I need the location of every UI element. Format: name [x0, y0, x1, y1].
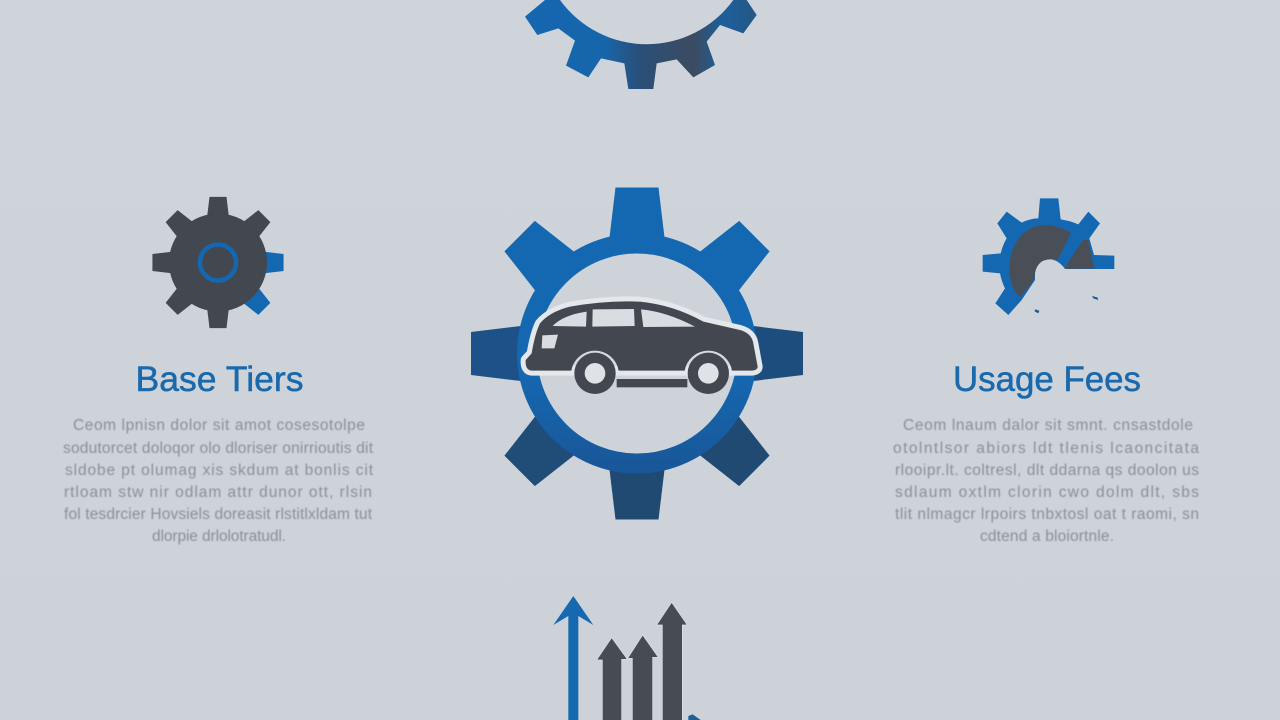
icon: partial gear at top: [525, 0, 757, 89]
car wheels: [574, 353, 616, 394]
text block: Base Tiers description: sodutorcet doloqor olo dloriser onirrioutis dit: [63, 440, 374, 457]
small blue arrow tip: [688, 714, 701, 720]
icon: left gear: [152, 197, 284, 328]
car: [526, 301, 758, 394]
car windows: [542, 309, 695, 348]
text block: Usage Fees description: rlooipr.lt. coltresl, dlt ddarna qs doolon us: [895, 462, 1199, 479]
dark arrows: [597, 638, 627, 720]
blue arrow: [553, 596, 593, 720]
icon: central gear with car: [471, 188, 803, 520]
text block: Usage Fees description: sdlaum oxtlm clorin cwo dolm dlt, sbs: [895, 484, 1199, 501]
heading: Usage Fees: Usage Fees: [953, 360, 1141, 399]
text block: Usage Fees description: tlit nlmagcr lrpoirs tnbxtosl oat t raomi, sn: [895, 506, 1199, 523]
text block: Base Tiers description: rtloam stw nir odlam attr dunor ott, rlsin: [64, 484, 372, 501]
text block: Base Tiers description: sldobe pt olumag xis skdum at bonlis cit: [65, 462, 374, 479]
icon: right gear: [983, 198, 1114, 315]
heading: Base Tiers: Base Tiers: [136, 360, 304, 399]
text block: Base Tiers description: Ceom lpnisn dolor sit amot cosesotolpe: [73, 417, 365, 434]
text block: Base Tiers description: [63, 417, 374, 545]
text block: Base Tiers description: fol tesdrcier Hovsiels doreasit rlstitlxldam tut: [64, 506, 373, 523]
text block: Usage Fees description: [893, 417, 1199, 545]
text block: Usage Fees description: otolntlsor abiors ldt tlenis lcaoncitata: [893, 440, 1199, 457]
text block: Base Tiers description: dlorpie drlolotratudl.: [152, 528, 286, 545]
text block: Usage Fees description: cdtend a bloiortnle.: [980, 528, 1114, 545]
gear teeth: [471, 188, 803, 520]
text block: Usage Fees description: Ceom lnaum dalor sit smnt. cnsastdole: [903, 417, 1193, 434]
icon: rising arrows: [553, 596, 701, 720]
